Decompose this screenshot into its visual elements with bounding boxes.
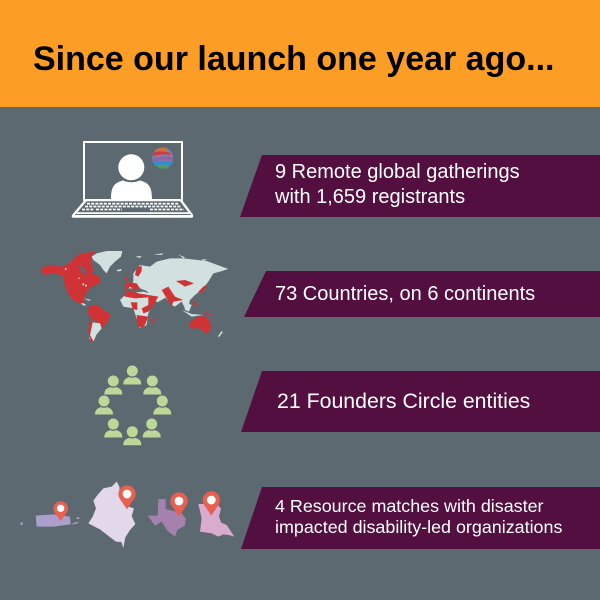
text: gatherings: 9 Remote global gatherings [275,161,520,183]
banner: countries [244,271,600,317]
world map [41,251,228,342]
banner: founders circle [241,371,600,432]
banner: resource matches [241,487,600,549]
text: resource matches: impacted disability-led organizations [275,517,562,537]
text: countries: 73 Countries, on 6 continents [275,283,535,305]
map: Puerto Rico with pin [20,501,79,527]
text: gatherings: with 1,659 registrants [274,186,465,208]
icon: person [111,154,152,200]
header band [0,0,600,107]
disaster region maps with pins [20,482,234,548]
text: founders: 21 Founders Circle entities [277,389,530,413]
map: Americas [41,251,122,342]
text: resource matches: 4 Resource matches with disaster [275,496,544,516]
icon: globe logo [152,148,173,169]
map: Colombia with pin [88,482,136,548]
title: Since our launch one year ago... [33,40,554,78]
icon: keyboard [72,200,193,218]
icon: circle of people [95,366,171,445]
icon: laptop video call [72,142,193,218]
map: Texas and Louisiana with pins [148,491,234,537]
map: Europe Africa Asia Oceania [120,253,228,337]
banner: remote gatherings [240,155,600,217]
